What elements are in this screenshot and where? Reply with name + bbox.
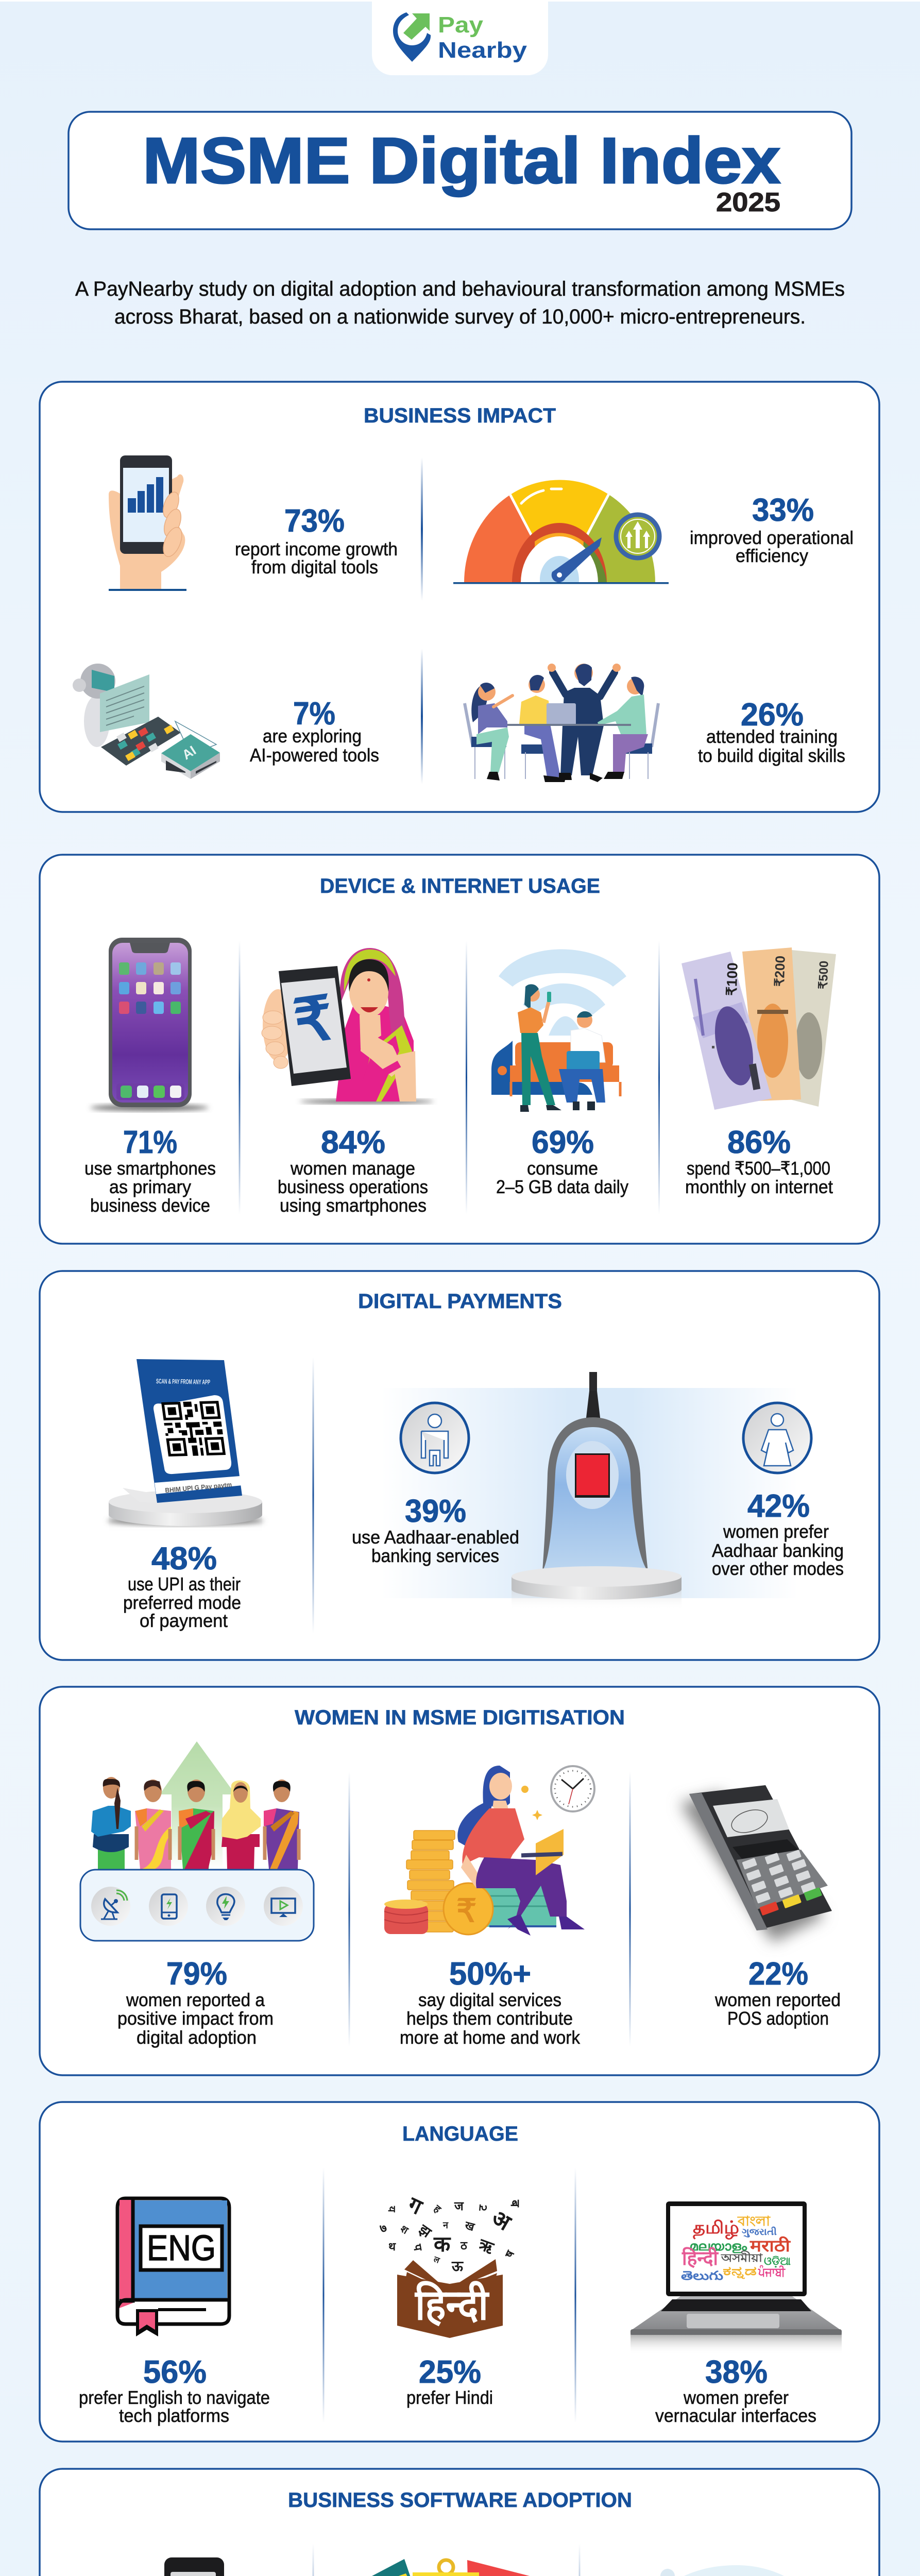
clock <box>551 1766 594 1811</box>
stat: 33%: improved operational <box>690 527 854 548</box>
icon: five women with arrow <box>80 1741 314 1941</box>
icon: woman on coins with clock: ₹ <box>456 1893 476 1929</box>
icon: laptop with languages: తెలుగు <box>681 2269 723 2283</box>
icon: woman badge <box>743 1403 811 1473</box>
icon: laptop with languages: ਪੰਜਾਬੀ <box>758 2265 786 2279</box>
stat: 38%: women prefer <box>683 2387 789 2408</box>
stat: 26%: 26% <box>741 697 804 733</box>
heading: BUSINESS IMPACT <box>364 404 556 427</box>
stat: 39%: 39% <box>405 1494 466 1529</box>
stat: 38%: vernacular interfaces <box>655 2405 816 2426</box>
stat: 22%: women reported <box>714 1989 841 2010</box>
woman 2 <box>135 1808 171 1869</box>
icon: QR code stand: BHIM UPI G Pay paytm <box>165 1481 232 1494</box>
stat: 50%+: helps them contribute <box>406 2008 573 2029</box>
stat: 84%: using smartphones <box>280 1195 427 1216</box>
floating letters: ७ <box>378 2221 389 2236</box>
floating letters <box>378 2192 522 2274</box>
floating letters: प <box>411 2243 425 2252</box>
stat: 73%: from digital tools <box>251 556 378 578</box>
heading: DEVICE & INTERNET USAGE <box>320 875 600 897</box>
panel: women in MSME digitisation <box>40 1687 879 2075</box>
stat: 42%: Aadhaar banking <box>712 1540 844 1561</box>
heading: LANGUAGE <box>402 2123 518 2145</box>
floating letters: ल <box>432 2255 441 2265</box>
woman 3 <box>179 1808 214 1869</box>
stat: 69%: 2–5 GB data daily <box>496 1176 628 1197</box>
stat: 7%: are exploring <box>263 725 362 747</box>
woman 1 <box>98 1839 125 1869</box>
icon: light bulb <box>206 1887 245 1926</box>
icon: woman with phone <box>262 948 434 1104</box>
floating letters: झ <box>416 2221 435 2241</box>
icon: laptop with languages: தமிழ் <box>693 2218 739 2240</box>
icon: laptop with languages: ಕನ್ನಡ <box>723 2264 757 2279</box>
stat: 79% <box>117 1956 274 2048</box>
title box <box>69 112 851 229</box>
panel: digital payments <box>40 1271 879 1660</box>
icon: rupee notes: ₹200 <box>772 956 788 987</box>
stat: 7%: AI-powered tools <box>250 744 379 766</box>
floating letters: ऋ <box>476 2234 497 2257</box>
red coins <box>384 1900 428 1934</box>
stat: 48%: preferred mode <box>123 1592 241 1613</box>
stat: 48%: 48% <box>151 1541 217 1577</box>
icon: rupee notes: ₹100 <box>724 962 741 996</box>
icon: speedometer gauge <box>453 480 669 584</box>
stat: 25%: 25% <box>419 2354 481 2390</box>
icon: woman on coins with clock <box>384 1766 594 1936</box>
stat: 71%: use smartphones <box>84 1158 216 1179</box>
stat: 69% <box>496 1125 628 1197</box>
icon: laptop with languages <box>631 2201 842 2354</box>
stat: 84%: women manage <box>290 1158 415 1179</box>
stat: 56% <box>79 2354 270 2426</box>
icon: fingerprint scanner <box>512 1372 682 1611</box>
stat: 22%: POS adoption <box>727 2008 829 2029</box>
icon: monitor play <box>264 1887 303 1926</box>
icon: satellite dish <box>91 1887 130 1926</box>
stat: 42%: 42% <box>747 1488 810 1524</box>
intro text <box>75 278 845 328</box>
icon: AI robot and phone: AI <box>179 742 199 762</box>
stat: 7%: 7% <box>293 696 335 732</box>
stat: 71%: as primary <box>109 1176 191 1197</box>
icon: CRM illustration <box>638 2565 846 2576</box>
logo card <box>372 0 548 75</box>
stat: 7% <box>250 696 379 766</box>
title: MSME Digital Index <box>143 124 780 197</box>
floating letters: य <box>386 2206 397 2213</box>
stat: 73%: 73% <box>284 503 345 539</box>
background band <box>381 1388 798 1598</box>
stat: 38% <box>655 2354 816 2426</box>
icon: laptop with languages: हिन्दी <box>682 2247 719 2269</box>
icon: hand holding phone <box>109 455 186 591</box>
icon: AI robot and phone <box>73 664 220 779</box>
woman 5 <box>264 1808 299 1869</box>
stat: 50%+: more at home and work <box>400 2027 581 2048</box>
hair <box>457 1766 510 1852</box>
icon: woman with phone: ₹ <box>289 984 337 1057</box>
floating letters: ब <box>508 2199 522 2208</box>
floating letters: श <box>398 2223 411 2237</box>
stat: 48%: of payment <box>140 1610 228 1631</box>
stat: 79%: 79% <box>166 1956 227 1992</box>
stat: 56%: tech platforms <box>119 2405 229 2426</box>
standing man <box>574 664 593 682</box>
stat: 42%: over other modes <box>712 1558 844 1579</box>
icon: team meeting <box>465 664 658 782</box>
floating letters: ख <box>463 2218 476 2233</box>
icon: laptop with languages: বাংলা <box>737 2213 771 2229</box>
intro text: A PayNearby study on digital adoption and behavioural transformation among MSMEs <box>75 278 845 300</box>
stat: 56%: 56% <box>143 2354 207 2390</box>
stat: 50%+ <box>400 1956 581 2048</box>
stat: 22% <box>714 1956 841 2029</box>
heading: BUSINESS SOFTWARE ADOPTION <box>288 2489 632 2512</box>
icon: English book: ENG <box>147 2228 216 2268</box>
floating letters: न <box>442 2220 449 2230</box>
stat: 39% <box>352 1494 519 1566</box>
stat: 56%: prefer English to navigate <box>79 2387 270 2408</box>
panel: business impact <box>40 382 879 812</box>
woman 4 <box>222 1834 260 1869</box>
icon: man badge <box>401 1403 469 1473</box>
icon: laptop with languages: മലയാളം <box>689 2240 747 2253</box>
icon: phone charge <box>149 1887 188 1926</box>
stat: 86%: spend ₹500–₹1,000 <box>687 1158 830 1179</box>
stat: 48%: use UPI as their <box>128 1573 241 1595</box>
icon: laptop with languages: ગુજરાતી <box>742 2226 777 2238</box>
panel: business software adoption <box>40 2469 879 2576</box>
stat: 86%: 86% <box>727 1125 791 1160</box>
icon tray <box>80 1870 314 1941</box>
stat: 84% <box>278 1125 428 1216</box>
stat: 71%: business device <box>90 1195 210 1216</box>
heading: DIGITAL PAYMENTS <box>358 1290 562 1313</box>
icon: POS terminal <box>680 1785 832 1942</box>
stat: 33%: efficiency <box>736 545 808 566</box>
floating letters: ह <box>431 2202 444 2216</box>
stat: 26% <box>698 697 845 766</box>
logo wordmark: Pay <box>438 12 484 38</box>
stat: 73% <box>235 503 398 578</box>
icon: clipboard analytics <box>358 2559 537 2576</box>
floating letters: ष <box>502 2248 517 2260</box>
stat: 50%+: say digital services <box>418 1989 561 2010</box>
floating letters: ज <box>454 2199 464 2213</box>
heading: WOMEN IN MSME DIGITISATION <box>295 1706 625 1729</box>
floating letters: क <box>433 2232 451 2256</box>
icon: QR code stand: SCAN & PAY FROM ANY APP <box>156 1377 210 1386</box>
stat: 86% <box>685 1125 833 1197</box>
intro text: across Bharat, based on a nationwide survey of 10,000+ micro-entrepreneurs. <box>114 306 806 328</box>
stat: 42%: women prefer <box>723 1521 829 1542</box>
man in yellow <box>529 676 545 693</box>
stat: 73%: report income growth <box>235 538 398 560</box>
stat: 86%: monthly on internet <box>685 1176 833 1197</box>
stat: 33%: 33% <box>752 493 814 528</box>
woman in mint <box>627 678 643 694</box>
icon: Hindi book with letters <box>378 2192 522 2338</box>
stat: 48% <box>123 1541 241 1631</box>
floating letters: ग <box>404 2192 427 2219</box>
stat: 39%: use Aadhaar-enabled <box>352 1527 519 1548</box>
stat: 84%: business operations <box>278 1176 428 1197</box>
floating letters: ठ <box>460 2239 468 2252</box>
icon: laptop with languages: অসমীয়া <box>721 2250 763 2264</box>
stat: 42% <box>712 1488 844 1579</box>
coin stack <box>406 1831 455 1932</box>
stat: 79%: digital adoption <box>137 2027 257 2048</box>
logo wordmark <box>438 12 527 63</box>
panel: device and internet usage <box>40 855 879 1244</box>
stat: 26%: to build digital skills <box>698 745 845 766</box>
woman <box>471 685 489 722</box>
stat: 71% <box>84 1125 216 1216</box>
icon: smartphone <box>90 938 209 1111</box>
stat: 69%: consume <box>527 1158 598 1179</box>
year: 2025 <box>716 188 780 217</box>
stat: 38%: 38% <box>705 2354 768 2390</box>
icon: QR code stand <box>107 1359 264 1533</box>
icon: rupee notes <box>682 947 836 1110</box>
floating letters: ट <box>476 2204 489 2212</box>
stat: 25%: prefer Hindi <box>406 2387 493 2408</box>
icon: wifi and people <box>491 949 626 1112</box>
icon: PayNearby pin <box>393 12 431 62</box>
stat: 79%: positive impact from <box>117 2008 274 2029</box>
stat: 69%: 69% <box>532 1125 594 1160</box>
icon: English book <box>117 2198 229 2336</box>
stat: 79%: women reported a <box>126 1989 265 2010</box>
floating letters: ऊ <box>451 2258 464 2274</box>
stat: 26%: attended training <box>706 726 838 747</box>
stat: 39%: banking services <box>371 1545 499 1566</box>
icon: Hindi book with letters: हिन्दी <box>414 2281 490 2329</box>
stat: 71%: 71% <box>123 1125 177 1160</box>
icon: card terminal and phone <box>64 2557 264 2576</box>
icon: laptop with languages: मराठी <box>749 2236 791 2255</box>
floating letters: अ <box>487 2205 516 2236</box>
stat: 50%+: 50%+ <box>449 1956 531 1992</box>
logo wordmark: Nearby <box>438 38 527 63</box>
stat: 84%: 84% <box>321 1125 385 1160</box>
icon: rupee notes: ₹500 <box>816 960 831 989</box>
panel: language <box>40 2102 879 2442</box>
floating letters: थ <box>388 2240 396 2253</box>
icon: laptop with languages: ଓଡ଼ିଆ <box>764 2255 791 2268</box>
stat: 33% <box>690 493 854 566</box>
stat: 25% <box>406 2354 493 2408</box>
stat: 22%: 22% <box>748 1956 808 1992</box>
